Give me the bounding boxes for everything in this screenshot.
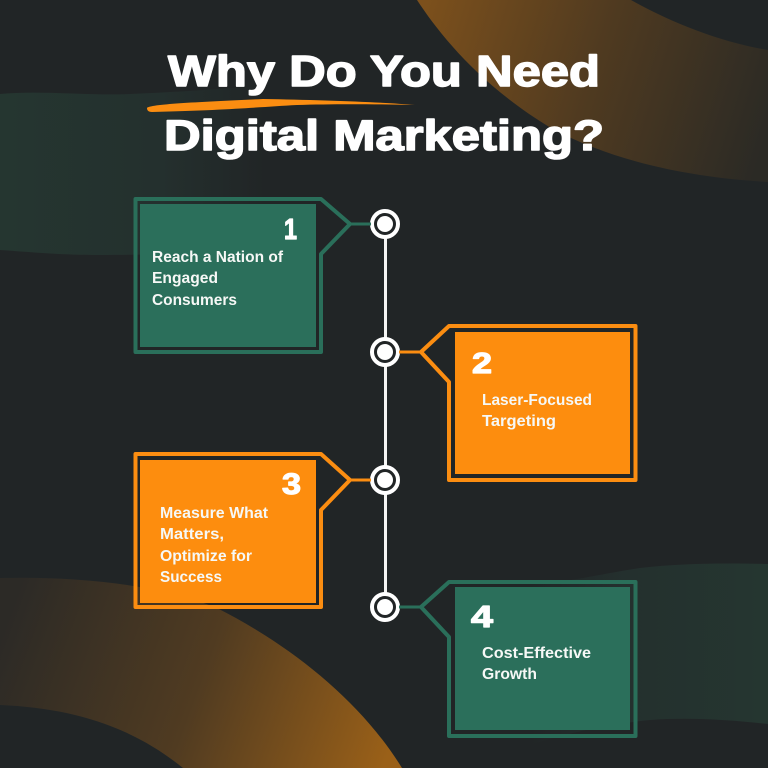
timeline: [372, 211, 398, 620]
panel 2 connector: [399, 350, 421, 354]
title: Why Do You Need: [168, 47, 600, 96]
panel 3 connector: [350, 478, 371, 482]
panel 1 number: 1: [284, 214, 297, 246]
panel 2: targeting: [399, 326, 636, 480]
panel 4 connector: [399, 606, 421, 608]
panel 1 text: Consumers: [152, 292, 237, 309]
panel 3 fill: [140, 460, 316, 603]
panel 2 number: 2: [472, 348, 492, 380]
node 4: [372, 594, 398, 620]
background shape: left green band: [0, 86, 265, 255]
panel 3 text: Measure What: [160, 505, 269, 522]
panel 2 text: Laser-Focused: [482, 392, 592, 409]
panel 1 callout outline: [136, 199, 350, 352]
panel 1 connector: [350, 222, 371, 226]
panel 3: measure: [136, 454, 371, 607]
panel 4: growth: [399, 582, 636, 736]
title: Digital Marketing?: [164, 112, 604, 160]
background shape: bottom-left orange arc: [0, 578, 402, 768]
timeline vertical line: [384, 224, 387, 607]
panel 1 text: [152, 249, 284, 309]
panel 3 callout outline: [136, 454, 350, 607]
node 1: [372, 211, 398, 237]
panel 4 callout outline: [421, 582, 636, 736]
panel 3 text: Matters,: [160, 526, 224, 543]
panel 4 number: 4: [471, 599, 494, 634]
panel 2 callout outline: [421, 326, 636, 480]
panel 4 text: Growth: [482, 666, 537, 683]
panel 1 text: Reach a Nation of: [152, 249, 284, 266]
panel 1: reach: [136, 199, 371, 352]
panel 4 text: Cost-Effective: [482, 645, 591, 662]
panel 1 fill: [140, 204, 316, 347]
background shape: bottom-right green band: [530, 563, 768, 745]
panel 3 text: Success: [160, 569, 222, 586]
node 2: [372, 339, 398, 365]
panel 3 number: 3: [282, 468, 301, 501]
panel 3 text: [160, 505, 269, 586]
panel 1 text: Engaged: [152, 270, 218, 287]
orange brush underline: [147, 99, 415, 112]
node 3: [372, 467, 398, 493]
panel 2 text: Targeting: [482, 413, 556, 430]
panel 2 text: [482, 392, 592, 430]
background shape: top-right orange arc: [417, 0, 768, 182]
title: [164, 47, 604, 160]
panel 4 fill: [455, 587, 630, 730]
panel 3 text: Optimize for: [160, 548, 252, 565]
panel 4 text: [482, 645, 591, 683]
panel 2 fill: [455, 332, 630, 474]
